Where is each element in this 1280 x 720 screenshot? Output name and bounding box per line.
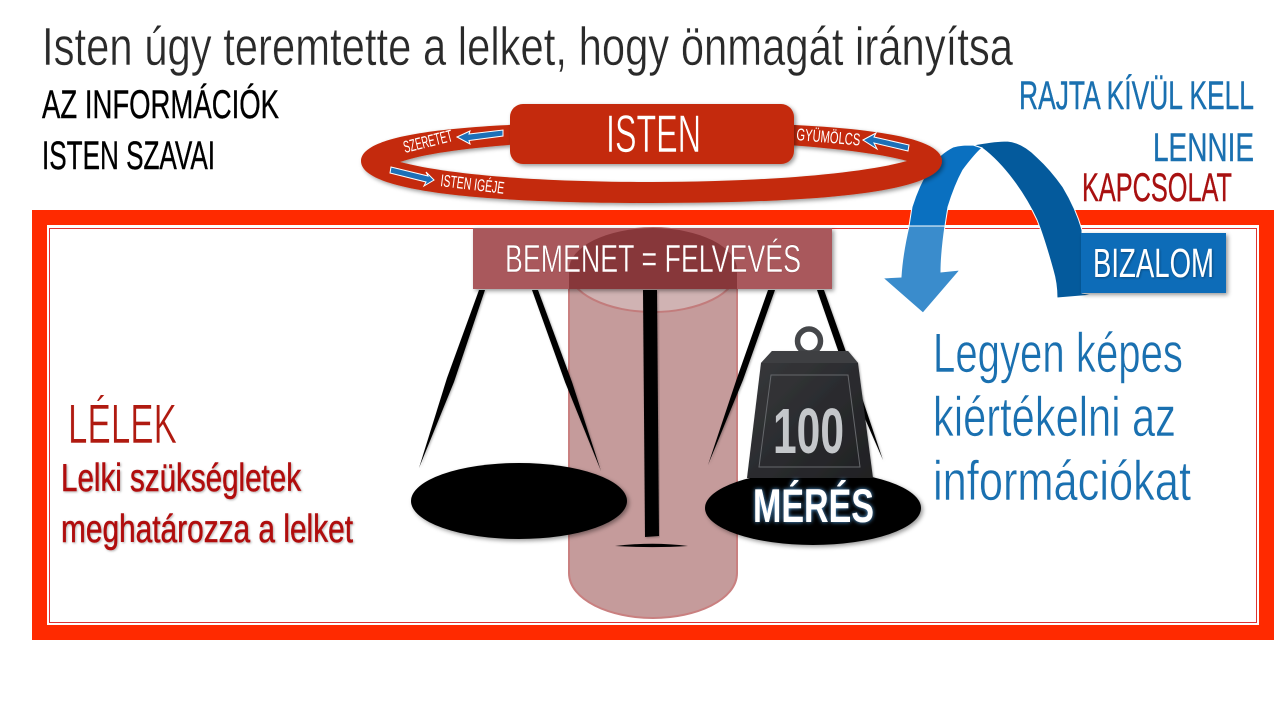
trust box (1081, 233, 1226, 293)
right pan (705, 471, 921, 545)
God ring (361, 104, 942, 203)
icon: 100 weight (747, 329, 873, 478)
input banner (473, 228, 832, 289)
scale base (615, 544, 688, 547)
input banner: BEMENET = FELVEVÉS (505, 238, 801, 281)
label: word of God: ISTEN IGÉJE (440, 171, 505, 198)
trust box: BIZALOM (1093, 240, 1214, 286)
text block: soul: meghatározza a lelket (61, 508, 353, 551)
text block: evaluation (933, 321, 1191, 512)
left pan (411, 463, 627, 539)
panel: soul frame (32, 210, 1274, 640)
text block: soul (61, 392, 353, 551)
God box: ISTEN (606, 105, 701, 164)
text block: evaluation: kiértékelni az (933, 385, 1176, 448)
scale (411, 228, 921, 618)
label: fruit: GYÜMÖLCS (796, 125, 861, 150)
scale column (643, 290, 659, 537)
arrow: trust curve (883, 141, 1093, 313)
arrow translucent lower part (883, 226, 960, 313)
strings (419, 290, 883, 471)
label: love: SZERETET (401, 126, 454, 157)
arrow dark back arc (973, 141, 1093, 298)
arrow: word of God (390, 167, 434, 186)
text block: evaluation: információkat (933, 449, 1191, 512)
arrow: fruit (863, 133, 909, 151)
text block: information: ISTEN SZAVAI (42, 134, 215, 178)
text block: soul: Lelki szükségletek (61, 457, 301, 500)
title: Isten úgy teremtette a lelket, hogy önmagát irányítsa (42, 17, 1014, 77)
text block: information: AZ INFORMÁCIÓK (42, 82, 279, 127)
translucent cylinder (569, 228, 737, 618)
text block: outside connection (1019, 73, 1254, 210)
text block: information (42, 82, 279, 178)
ring ellipse (361, 122, 942, 203)
text block: soul: LÉLEK (68, 392, 177, 455)
arrow: love (457, 130, 503, 144)
text block: evaluation: Legyen képes (933, 321, 1183, 384)
icon: 100 weight: 100 (773, 395, 844, 467)
God box (510, 104, 794, 164)
label: measurement: MÉRÉS (753, 479, 874, 532)
arrow front arc (909, 145, 982, 226)
